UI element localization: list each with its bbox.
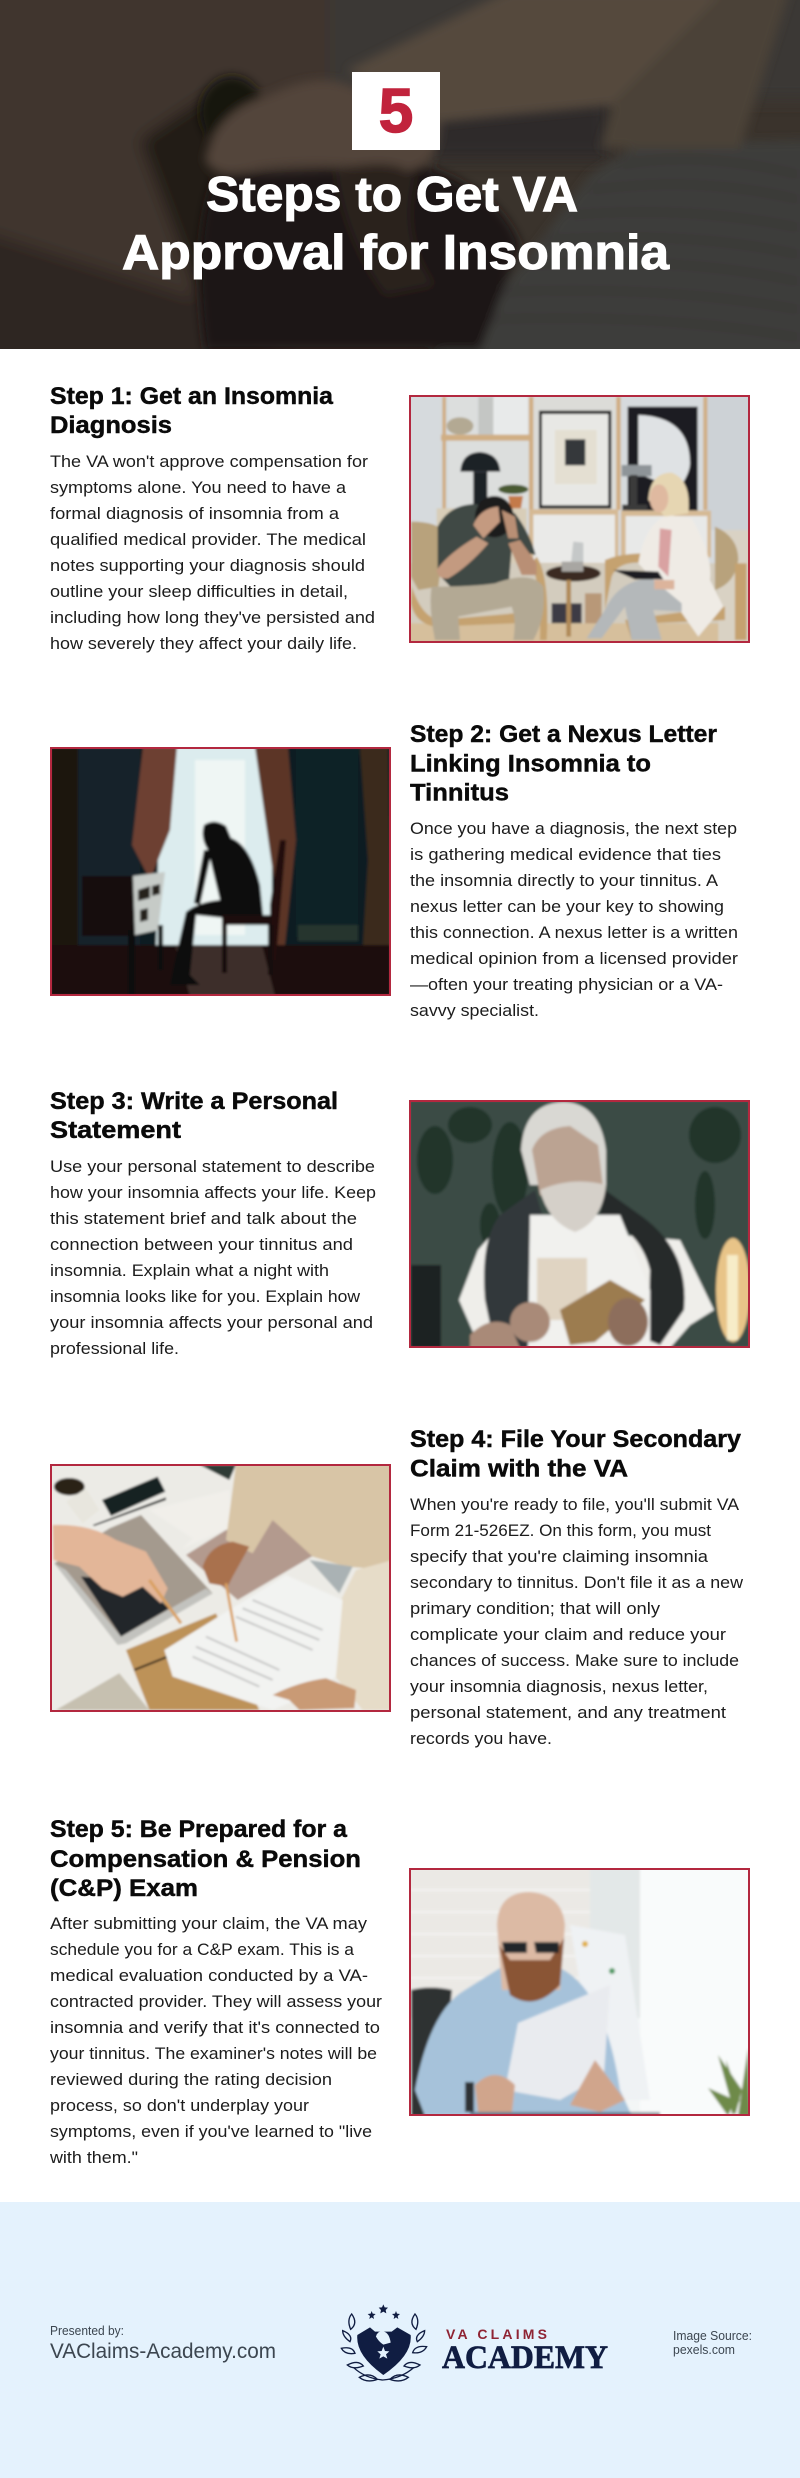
presented by: Presented by:	[50, 2323, 124, 2338]
image source	[673, 2328, 752, 2357]
step 2 heading	[410, 721, 717, 806]
panel: step 1	[50, 383, 755, 653]
title: Approval for Insomnia	[122, 226, 670, 280]
step 1 body text	[50, 452, 375, 653]
step 4 heading: Step 4: File Your Secondary	[410, 1426, 742, 1453]
step 2 body text: —often your treating physician or a VA-	[410, 975, 723, 994]
step 3 heading: Step 3: Write a Personal	[50, 1088, 338, 1115]
step 1 photo: man with head in hands and therapist	[405, 390, 755, 650]
logo: VA Claims Academy	[341, 2304, 608, 2381]
presented by: VAClaims-Academy.com	[50, 2340, 276, 2363]
step 2 body text: savvy specialist.	[410, 1001, 539, 1020]
step 2 body text: the insomnia directly to your tinnitus. A	[410, 871, 719, 890]
step 1 body text: qualified medical provider. The medical	[50, 530, 366, 549]
step 3 body text: professional life.	[50, 1339, 179, 1358]
step 2 body text: this connection. A nexus letter is a written	[410, 923, 738, 942]
step 5 body text: schedule you for a C&P exam. This is a	[50, 1940, 355, 1959]
step 1 body text: outline your sleep difficulties in detail,	[50, 582, 348, 601]
step 5 body text: medical evaluation conducted by a VA-	[50, 1966, 368, 1985]
step 4 body text	[410, 1495, 744, 1748]
step 3 heading: Statement	[50, 1117, 181, 1144]
header photo: man covering his eyes	[0, 0, 800, 380]
step 2 body text: medical opinion from a licensed provider	[410, 949, 738, 968]
step 5 heading: (C&P) Exam	[50, 1875, 198, 1902]
icon: eagle shield with laurels	[341, 2304, 427, 2381]
step 5 body text: contracted provider. They will assess your	[50, 1992, 382, 2011]
step 1 heading: Step 1: Get an Insomnia	[50, 383, 334, 410]
step 4 photo: hands reviewing documents at a laptop	[46, 1460, 396, 1720]
title: Steps to Get VA	[206, 168, 578, 222]
panel: step 2	[50, 721, 738, 1020]
step 4 heading	[410, 1426, 742, 1482]
image source: Image Source:	[673, 2328, 752, 2343]
step 4 body text: your insomnia diagnosis, nexus letter,	[410, 1677, 708, 1696]
step 5 body text: with them."	[49, 2148, 138, 2167]
step 1 body text: symptoms alone. You need to have a	[50, 478, 347, 497]
step 5 body text: process, so don't underplay your	[50, 2096, 309, 2115]
step 5 body text: After submitting your claim, the VA may	[50, 1914, 368, 1933]
step 2 heading: Step 2: Get a Nexus Letter	[410, 721, 717, 748]
step 5 body text	[49, 1914, 382, 2167]
step 3 body text: insomnia looks like for you. Explain how	[50, 1287, 361, 1306]
step 3 body text	[50, 1157, 376, 1358]
step 4 body text: When you're ready to file, you'll submit VA	[410, 1495, 740, 1514]
panel: step 3	[50, 1088, 750, 1358]
number badge	[352, 72, 440, 150]
step 5 body text: symptoms, even if you've learned to "live	[50, 2122, 372, 2141]
step 4 body text: specify that you're claiming insomnia	[410, 1547, 709, 1566]
step 3 body text: insomnia. Explain what a night with	[50, 1261, 329, 1280]
step 2 body text: Once you have a diagnosis, the next step	[410, 819, 737, 838]
step 2 photo: silhouette of man sitting by a window	[50, 747, 391, 996]
presented by	[50, 2323, 276, 2363]
step 3 photo: older man reading a letter	[409, 1100, 750, 1348]
logo wordmark: VA CLAIMS	[446, 2326, 547, 2342]
step 5 heading: Compensation & Pension	[50, 1846, 361, 1873]
panel: step 5	[49, 1816, 750, 2167]
title	[122, 168, 670, 280]
step 4 body text: records you have.	[410, 1729, 552, 1748]
step 1 heading: Diagnosis	[50, 412, 172, 439]
step 2 body text	[410, 819, 738, 1020]
step 5 photo: bearded man reading a paper	[409, 1868, 750, 2118]
step 3 body text: how your insomnia affects your life. Keep	[50, 1183, 376, 1202]
step 5 heading	[50, 1816, 361, 1902]
logo wordmark: ACADEMY	[442, 2340, 608, 2376]
step 2 heading: Linking Insomnia to	[410, 750, 651, 778]
step 3 body text: your insomnia affects your personal and	[50, 1313, 373, 1332]
step 4 heading: Claim with the VA	[410, 1456, 628, 1482]
step 1 body text: The VA won't approve compensation for	[50, 452, 368, 471]
step 4 body text: personal statement, and any treatment	[410, 1703, 726, 1722]
step 4 body text: primary condition; that will only	[410, 1599, 661, 1618]
step 5 body text: reviewed during the rating decision	[50, 2070, 332, 2089]
step 2 body text: is gathering medical evidence that ties	[410, 845, 721, 864]
step 4 body text: Form 21-526EZ. On this form, you must	[410, 1521, 711, 1540]
step 1 body text: notes supporting your diagnosis should	[50, 556, 365, 575]
step 1 heading	[50, 383, 334, 439]
step 1 body text: formal diagnosis of insomnia from a	[50, 504, 340, 523]
step 4 body text: chances of success. Make sure to include	[410, 1651, 739, 1670]
step 3 body text: connection between your tinnitus and	[50, 1235, 353, 1254]
step 5 body text: your tinnitus. The examiner's notes will be	[50, 2044, 377, 2063]
step 3 heading	[50, 1088, 338, 1144]
step 3 body text: this statement brief and talk about the	[50, 1209, 357, 1228]
step 5 body text: insomnia and verify that it's connected to	[50, 2018, 380, 2037]
panel: step 4	[46, 1426, 744, 1748]
header panel	[0, 0, 800, 380]
step 4 body text: complicate your claim and reduce your	[410, 1625, 726, 1644]
footer panel	[0, 2202, 800, 2478]
step 3 body text: Use your personal statement to describe	[50, 1157, 375, 1176]
step 5 heading: Step 5: Be Prepared for a	[50, 1816, 348, 1843]
step 1 body text: how severely they affect your daily life.	[50, 634, 357, 653]
step 4 body text: secondary to tinnitus. Don't file it as a new	[410, 1573, 744, 1592]
step 2 heading: Tinnitus	[410, 780, 509, 806]
number badge: 5	[379, 77, 413, 146]
step 2 body text: nexus letter can be your key to showing	[410, 897, 724, 916]
image source: pexels.com	[673, 2342, 735, 2357]
step 1 body text: including how long they've persisted and	[50, 608, 375, 627]
